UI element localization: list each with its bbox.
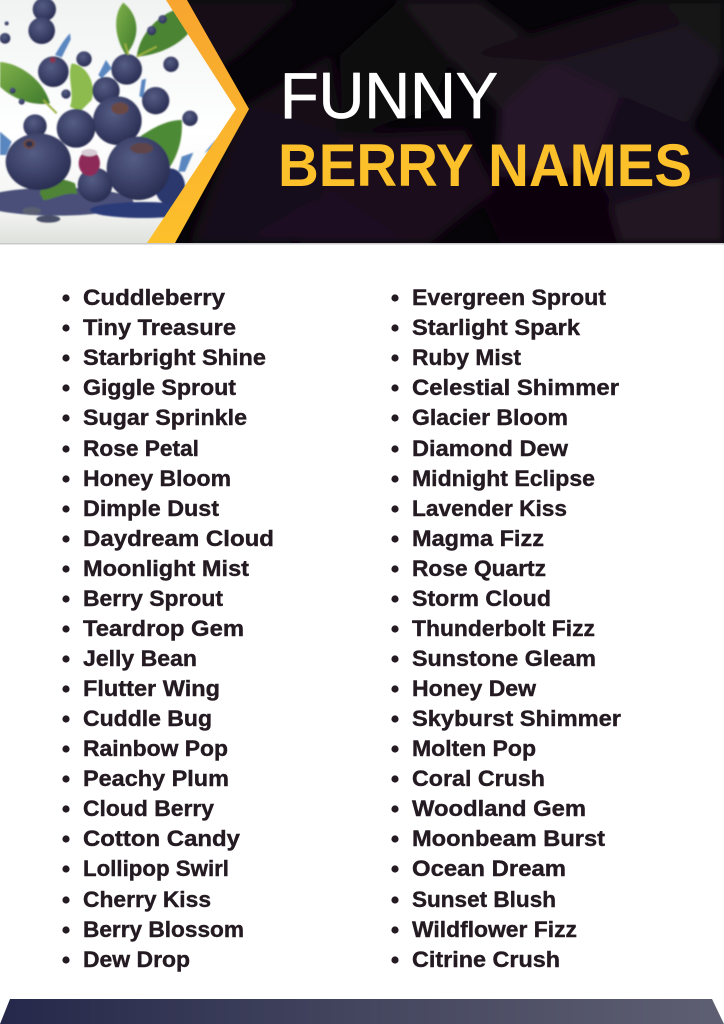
title: BERRY NAMES: BERRY NAMES xyxy=(278,132,692,199)
item: Starbright Shine: Starbright Shine xyxy=(83,345,266,370)
item: Diamond Dew: Diamond Dew xyxy=(412,436,569,461)
item: Teardrop Gem: Teardrop Gem xyxy=(83,616,244,641)
item: Tiny Treasure: Tiny Treasure xyxy=(83,315,236,340)
item: Midnight Eclipse: Midnight Eclipse xyxy=(412,466,595,491)
item: Flutter Wing: Flutter Wing xyxy=(83,676,220,701)
item: Rainbow Pop: Rainbow Pop xyxy=(83,736,228,761)
item: Daydream Cloud: Daydream Cloud xyxy=(83,526,274,551)
header bottom line xyxy=(0,243,724,244)
item: Woodland Gem: Woodland Gem xyxy=(412,796,586,821)
item: Cherry Kiss: Cherry Kiss xyxy=(83,887,211,912)
item: Wildflower Fizz: Wildflower Fizz xyxy=(412,917,577,942)
item: Honey Bloom: Honey Bloom xyxy=(83,466,231,491)
item: Molten Pop: Molten Pop xyxy=(412,736,536,761)
item: Magma Fizz: Magma Fizz xyxy=(412,526,544,551)
dark faceted background xyxy=(160,0,724,243)
item: Ruby Mist: Ruby Mist xyxy=(412,345,521,370)
item: Celestial Shimmer: Celestial Shimmer xyxy=(412,375,619,400)
item: Storm Cloud: Storm Cloud xyxy=(412,586,551,611)
item: Dimple Dust: Dimple Dust xyxy=(83,496,220,521)
item: Jelly Bean: Jelly Bean xyxy=(83,646,197,671)
item: Dew Drop: Dew Drop xyxy=(83,947,190,972)
berry juice and stems xyxy=(23,43,157,176)
item: Citrine Crush: Citrine Crush xyxy=(412,947,560,972)
item: Rose Petal: Rose Petal xyxy=(83,436,199,461)
item: Sugar Sprinkle: Sugar Sprinkle xyxy=(83,405,247,430)
item: Berry Sprout: Berry Sprout xyxy=(83,586,224,611)
item: Peachy Plum: Peachy Plum xyxy=(83,766,229,791)
item: Moonbeam Burst: Moonbeam Burst xyxy=(412,826,606,851)
item: Coral Crush: Coral Crush xyxy=(412,766,545,791)
item: Cuddleberry: Cuddleberry xyxy=(83,285,226,310)
item: Ocean Dream: Ocean Dream xyxy=(412,856,566,881)
item: Cuddle Bug: Cuddle Bug xyxy=(83,706,212,731)
item: Skyburst Shimmer: Skyburst Shimmer xyxy=(412,706,621,731)
blueberries xyxy=(0,0,198,202)
photo: blueberries splash xyxy=(0,0,250,243)
item: Lollipop Swirl: Lollipop Swirl xyxy=(83,856,229,881)
title: FUNNY: FUNNY xyxy=(280,59,498,132)
item: Cotton Candy: Cotton Candy xyxy=(83,826,241,851)
item: Berry Blossom: Berry Blossom xyxy=(83,917,244,942)
item: Sunstone Gleam: Sunstone Gleam xyxy=(412,646,596,671)
item: Honey Dew: Honey Dew xyxy=(412,676,537,701)
gold chevron xyxy=(147,0,249,243)
item: Starlight Spark: Starlight Spark xyxy=(412,315,581,340)
item: Evergreen Sprout: Evergreen Sprout xyxy=(412,285,607,310)
item: Rose Quartz: Rose Quartz xyxy=(412,556,546,581)
header banner xyxy=(0,0,724,243)
footer trapezoid bar xyxy=(0,999,724,1024)
left column list xyxy=(62,285,274,972)
right column list xyxy=(391,285,621,972)
item: Cloud Berry: Cloud Berry xyxy=(83,796,214,821)
item: Lavender Kiss: Lavender Kiss xyxy=(412,496,567,521)
item: Giggle Sprout: Giggle Sprout xyxy=(83,375,237,400)
item: Sunset Blush: Sunset Blush xyxy=(412,887,556,912)
leaves xyxy=(0,3,188,200)
item: Thunderbolt Fizz: Thunderbolt Fizz xyxy=(412,616,595,641)
item: Moonlight Mist: Moonlight Mist xyxy=(83,556,250,581)
powder and splash base xyxy=(0,33,216,223)
item: Glacier Bloom: Glacier Bloom xyxy=(412,405,568,430)
